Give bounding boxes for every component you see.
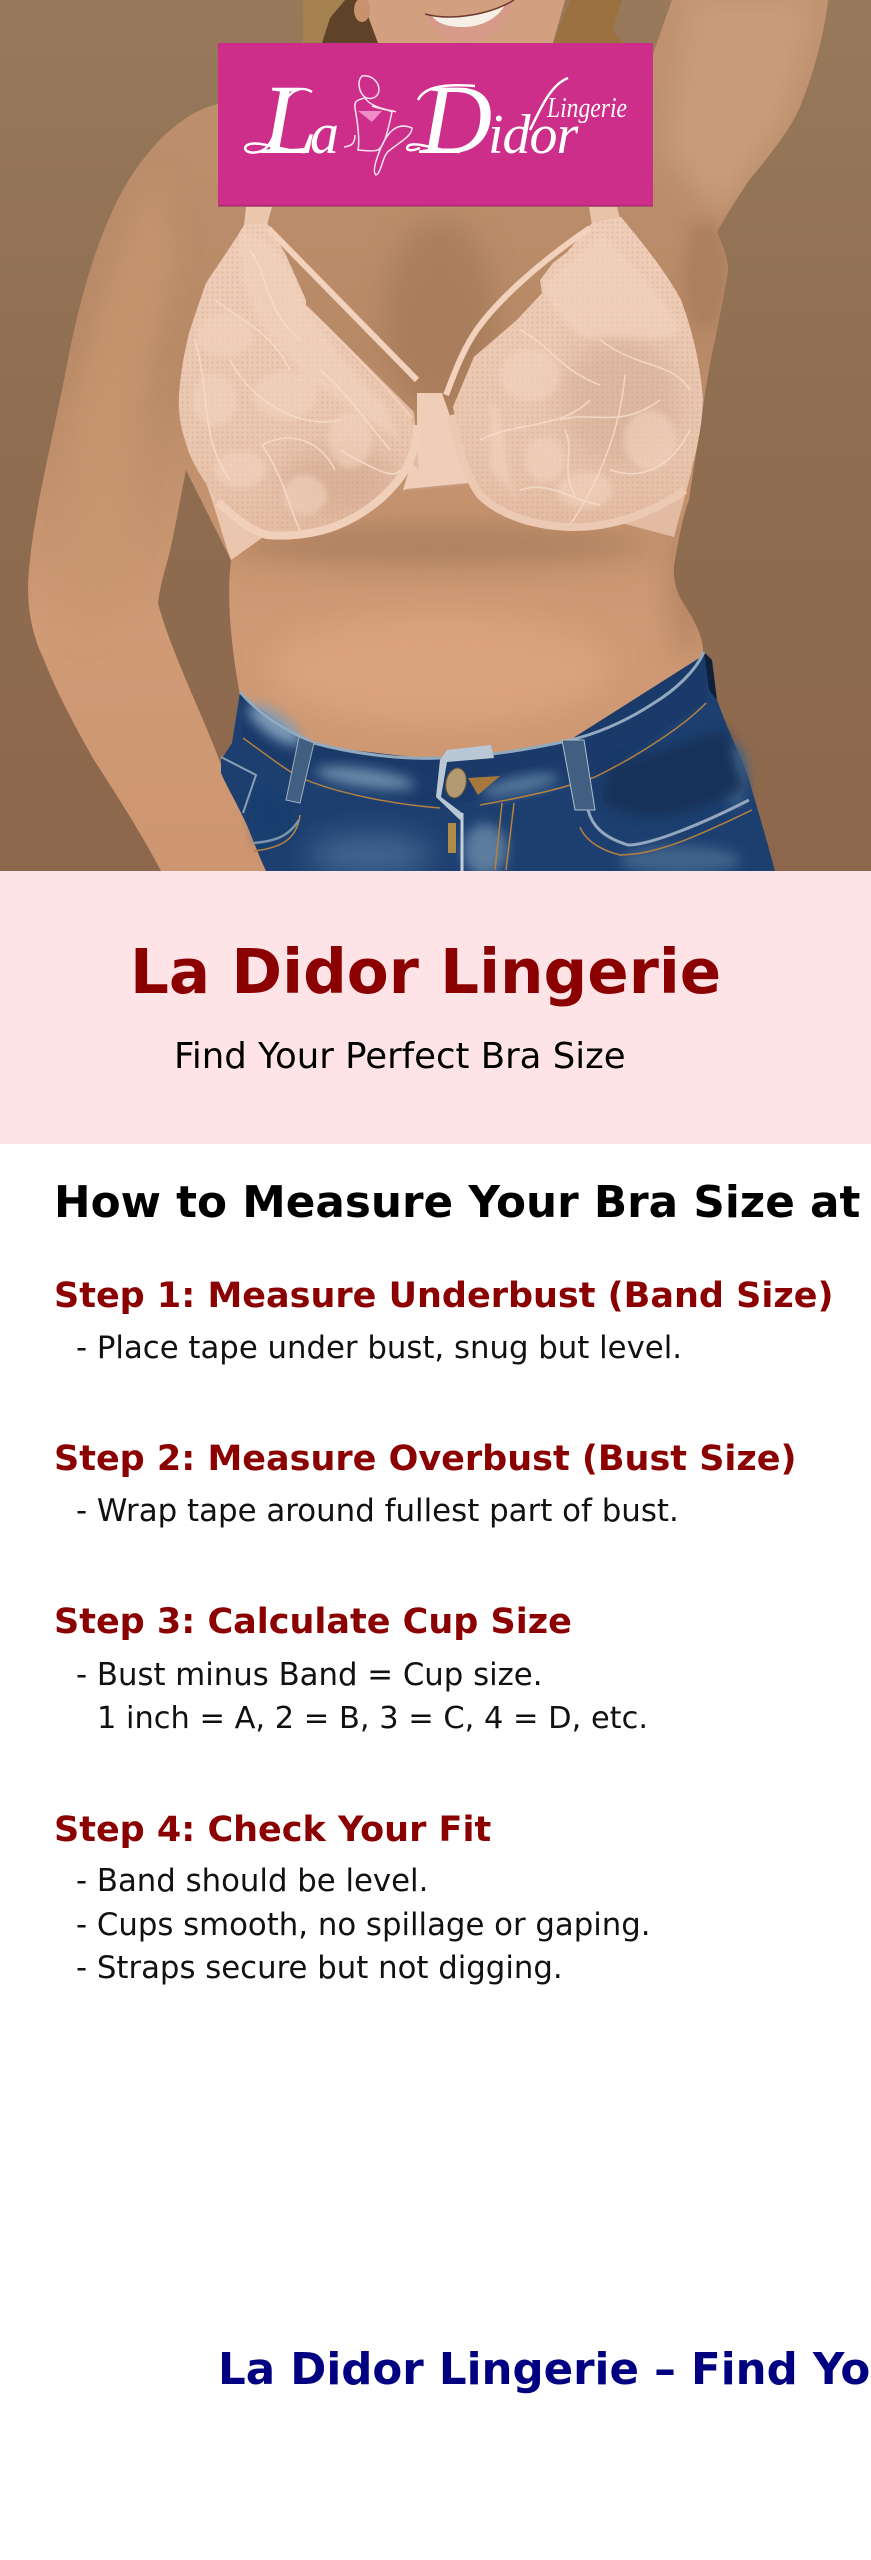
right hip wash (723, 745, 747, 805)
centre gore (403, 393, 471, 490)
left cup lace motifs (193, 235, 400, 515)
figure knee line (372, 106, 396, 112)
D swash (407, 85, 475, 152)
studio background (0, 0, 871, 871)
logo bottom edge (218, 205, 653, 206)
left strap band (268, 228, 417, 380)
step 4 line 2: - Cups smooth, no spillage or gaping. (76, 1907, 651, 1943)
smile line (425, 0, 514, 17)
figure briefs (358, 111, 382, 122)
model body (28, 0, 828, 871)
right cup base (453, 217, 703, 523)
gore shadow (406, 484, 468, 490)
hair right (553, 0, 623, 43)
step 4 (54, 1810, 651, 1986)
D and d swashes (407, 78, 568, 152)
figure back (344, 135, 355, 147)
step 4 line 1: - Band should be level. (76, 1863, 428, 1899)
logo word Lingerie: Lingerie (546, 93, 627, 124)
step 3 line 1: - Bust minus Band = Cup size. (76, 1657, 542, 1693)
left cup dark tone (280, 445, 400, 515)
left cup lace lines (195, 250, 400, 530)
logo background (218, 43, 653, 206)
figure torso (355, 98, 392, 151)
right belt loop (562, 740, 595, 810)
step 3 line 2: 1 inch = A, 2 = B, 3 = C, 4 = D, etc. (97, 1701, 648, 1736)
teeth (432, 5, 505, 27)
under-bust shadow (230, 525, 650, 565)
step 1 title: Step 1: Measure Underbust (Band Size) (54, 1276, 833, 1316)
waist dark strip (704, 652, 717, 700)
raised arm tone (668, 4, 804, 204)
logo banner (218, 43, 653, 206)
jeans (221, 652, 775, 876)
right cup lace lines (480, 330, 690, 525)
button (443, 766, 469, 800)
left strap (244, 207, 272, 225)
waistband wash (314, 762, 416, 794)
pocket dark (600, 730, 745, 817)
step 2 title: Step 2: Measure Overbust (Bust Size) (54, 1439, 797, 1479)
waistband dark (240, 655, 708, 807)
lips (425, 0, 514, 43)
button tab (436, 745, 494, 820)
buttonhole stitching (468, 776, 500, 795)
left belt loop (286, 737, 314, 803)
figure leg (374, 126, 412, 175)
belly highlight (285, 625, 595, 716)
left cup lace (178, 223, 414, 532)
right strap band (446, 228, 590, 395)
logo word Didor: D (418, 64, 492, 175)
left cup base (178, 223, 414, 532)
left wire inner (306, 307, 412, 418)
armpit shadow (684, 224, 725, 326)
pocket edge (588, 800, 749, 845)
logo word Didor: idor (488, 104, 579, 166)
step 1 (54, 1276, 833, 1366)
zipper (448, 823, 456, 853)
hair (303, 0, 344, 43)
step 1 body: - Place tape under bust, snug but level. (76, 1330, 682, 1366)
d ascender (530, 78, 568, 130)
left coin pocket (221, 757, 256, 813)
left cup mesh (182, 226, 413, 528)
right cup mesh (453, 218, 703, 523)
hair shadow left (322, 0, 378, 43)
logo word La: a (310, 101, 339, 166)
left pocket edge (254, 820, 299, 843)
orange stitching (243, 703, 752, 870)
hero photo (0, 0, 871, 876)
face (362, 0, 565, 43)
step 4 title: Step 4: Check Your Fit (54, 1810, 491, 1850)
lower right wash (620, 846, 740, 874)
subtitle: Find Your Perfect Bra Size (174, 1036, 626, 1077)
waist side shadow (670, 520, 706, 660)
step 3 title: Step 3: Calculate Cup Size (54, 1602, 572, 1642)
right underwire (451, 415, 685, 527)
mesh panel left (306, 305, 419, 470)
left wash (242, 698, 308, 752)
body shading (70, 0, 815, 725)
right waistband wash (479, 769, 561, 801)
chest shadow (385, 220, 495, 420)
logo word La: L (260, 64, 318, 175)
logo figure (344, 76, 412, 175)
arm highlight (84, 218, 166, 430)
right cup lace motifs (490, 235, 680, 508)
main title: La Didor Lingerie (130, 937, 721, 1008)
denim base (221, 652, 775, 871)
left pocket dark (250, 790, 292, 843)
fly stitching (460, 813, 464, 871)
figure head (359, 76, 379, 98)
band right (624, 470, 692, 537)
waistband top stitching (240, 652, 704, 758)
step 2 body: - Wrap tape around fullest part of bust. (76, 1493, 679, 1529)
step 3 (54, 1602, 648, 1736)
left underwire (218, 425, 417, 536)
right strap (589, 207, 620, 224)
right cup dark tone (560, 335, 680, 465)
mesh panel right (453, 320, 517, 414)
step 2 (54, 1439, 797, 1529)
step 4 line 3: - Straps secure but not digging. (76, 1950, 563, 1986)
ear (354, 0, 370, 22)
title band (0, 871, 871, 1144)
L swash (245, 89, 312, 153)
right cup lace (453, 217, 703, 523)
fly wash (463, 824, 507, 876)
band left (206, 484, 263, 560)
bra (170, 207, 710, 565)
front wash (308, 835, 432, 875)
